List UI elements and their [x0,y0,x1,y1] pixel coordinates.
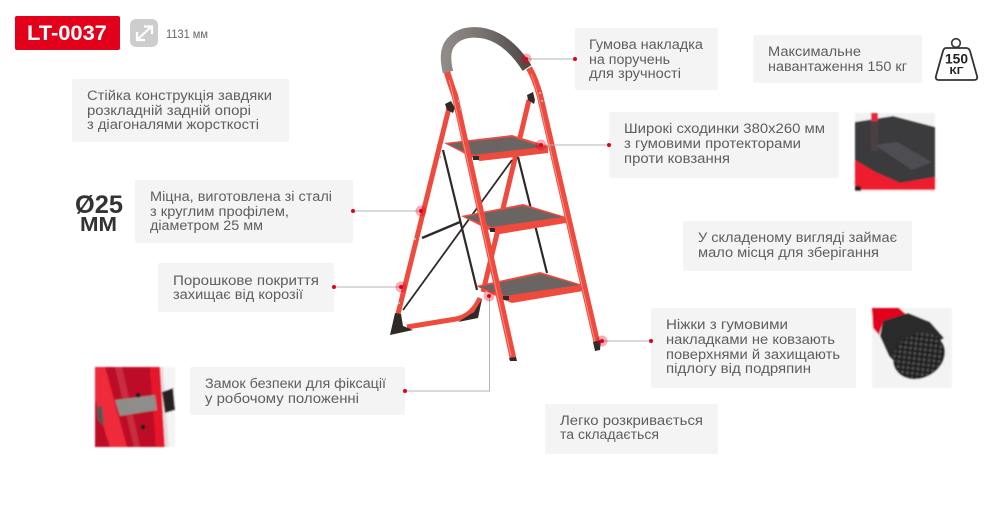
callout: compact storage [683,221,912,271]
front rails [447,68,597,358]
callout: easy folding [545,404,718,454]
diameter label: ММ [80,214,117,236]
callout: steel tube: з круглим профілем, [150,204,289,219]
callout: handle grip: Гумова накладка [589,37,704,52]
diameter label [75,191,123,236]
icon: height arrow [130,19,158,47]
icon: weight 150 kg: 150 [945,52,968,66]
handle grip [446,32,527,72]
callout: max load: Максимальне [768,44,861,59]
callout: stability: з діагоналями жорсткості [87,117,259,132]
model badge: LT-0037 [27,22,107,45]
rubber feet [509,340,601,361]
callout: stability: Стійка конструкція завдяки [87,88,272,103]
callout: wide steps: Широкі сходинки 380х260 мм [624,121,825,136]
callout: stability: розкладній задній опорі [87,103,251,118]
callout: handle grip [575,28,718,90]
photo: safety lock [95,367,175,447]
callout: wide steps: з гумовими протекторами [624,136,801,151]
callout: compact storage: мало місця для зберігання [698,245,879,260]
callout: rubber feet: поверхнями й захищають [666,347,840,362]
callout: powder coating: Порошкове покриття [173,273,319,288]
callout: rubber feet [651,308,856,388]
black braces [403,150,547,310]
callout: compact storage: У складеному вигляді займає [698,230,897,245]
callout: safety lock [190,367,405,415]
callout: rubber feet: Ніжки з гумовими [666,317,788,332]
callout: handle grip: на поручень [589,52,670,67]
rivets [398,92,543,304]
icon: weight 150 kg [936,39,977,80]
photo: step surface [855,113,935,192]
callout: max load [753,35,922,83]
ladder [390,32,601,361]
callout: wide steps [609,112,839,178]
height value: 1131 мм [166,29,208,41]
rear support legs [390,92,535,335]
callout: wide steps: проти ковзання [624,151,730,166]
top step [444,135,548,161]
leader: safety lock [403,290,494,393]
leader: coating [332,282,406,292]
callout: rubber feet: підлогу від подряпин [666,361,811,376]
icon: weight 150 kg: КГ [950,66,964,77]
callout: steel tube [135,180,353,243]
callout: easy folding: та складається [560,427,659,442]
leader: feet [596,336,653,346]
model badge [15,16,120,50]
callout: powder coating: захищає від корозії [173,287,303,302]
middle step [461,204,566,234]
callout: rubber feet: накладками не ковзають [666,332,835,347]
callout: max load: навантаження 150 кг [768,59,907,74]
photo: rubber foot [872,308,953,388]
leader: steel tube [351,206,426,216]
callout: easy folding: Легко розкривається [560,413,703,428]
leader: handle [520,54,577,64]
callout: steel tube: діаметром 25 мм [150,218,263,233]
leader: steps [536,140,611,150]
callout: handle grip: для зручності [589,66,681,81]
callout: safety lock: Замок безпеки для фіксації [205,376,386,391]
callout: steel tube: Міцна, виготовлена зі сталі [150,189,332,204]
callout: powder coating [158,263,334,312]
callout: safety lock: у робочому положенні [205,391,359,406]
diameter label: Ø25 [75,191,123,219]
bottom step [476,272,583,303]
callout: stability [72,79,289,142]
